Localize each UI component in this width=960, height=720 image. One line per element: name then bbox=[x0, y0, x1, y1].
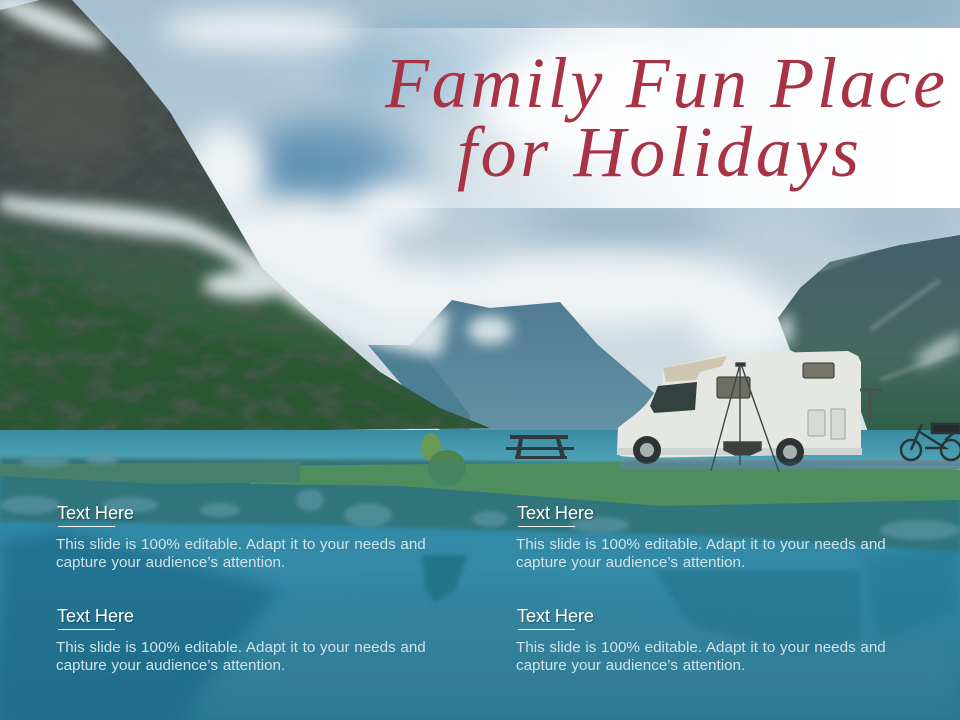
far centre mountain bbox=[368, 300, 660, 430]
title: Family Fun Place bbox=[384, 43, 945, 123]
text block: bottom right: This slide is 100% editable. Adapt it to your needs and bbox=[516, 639, 886, 656]
lake bbox=[0, 430, 960, 466]
gravel road bbox=[620, 460, 960, 469]
text block: top left: This slide is 100% editable. Adapt it to your needs and bbox=[56, 536, 426, 553]
white clouds bbox=[160, 12, 805, 360]
text block: top right: Text Here bbox=[517, 503, 594, 523]
far right mountain bbox=[778, 235, 960, 432]
text block: bottom left: This slide is 100% editable. Adapt it to your needs and bbox=[56, 639, 426, 656]
cloud bank over the mountain bbox=[0, 0, 960, 369]
bush bbox=[421, 433, 466, 486]
text block: bottom right: capture your audience’s attention. bbox=[516, 656, 745, 674]
reflections in the water bbox=[0, 530, 960, 720]
ridge in front of centre mountain bbox=[368, 345, 470, 430]
text block: bottom left: Text Here bbox=[57, 606, 134, 626]
text block: bottom right: Text Here bbox=[517, 606, 594, 626]
text block: top right: capture your audience’s attention. bbox=[516, 554, 745, 570]
text block: top left: Text Here bbox=[57, 503, 134, 523]
title bbox=[384, 43, 945, 192]
lower water with teal tint bbox=[0, 470, 960, 720]
right mountain snow streaks bbox=[820, 250, 960, 380]
text block: top left bbox=[56, 503, 426, 570]
left mountain bbox=[0, 0, 500, 440]
text block: bottom right bbox=[516, 606, 886, 674]
teal overlay on lower image bbox=[0, 462, 960, 720]
picnic bench bbox=[506, 435, 574, 459]
tripod with fire bowl bbox=[711, 363, 779, 472]
text block: bottom left bbox=[56, 606, 426, 674]
grass bank and rocks bbox=[0, 455, 960, 552]
camper van bbox=[617, 351, 882, 466]
text block: top left: capture your audience’s attention. bbox=[56, 554, 285, 570]
text block: bottom left: capture your audience’s attention. bbox=[56, 656, 285, 674]
blue sky patches bbox=[245, 0, 960, 239]
title: for Holidays bbox=[457, 112, 859, 192]
bicycle bbox=[901, 424, 960, 460]
text block: top right: This slide is 100% editable. Adapt it to your needs and bbox=[516, 536, 886, 553]
sky bbox=[0, 0, 960, 440]
translucent white title band bbox=[230, 28, 960, 208]
text block: top right bbox=[516, 503, 886, 570]
